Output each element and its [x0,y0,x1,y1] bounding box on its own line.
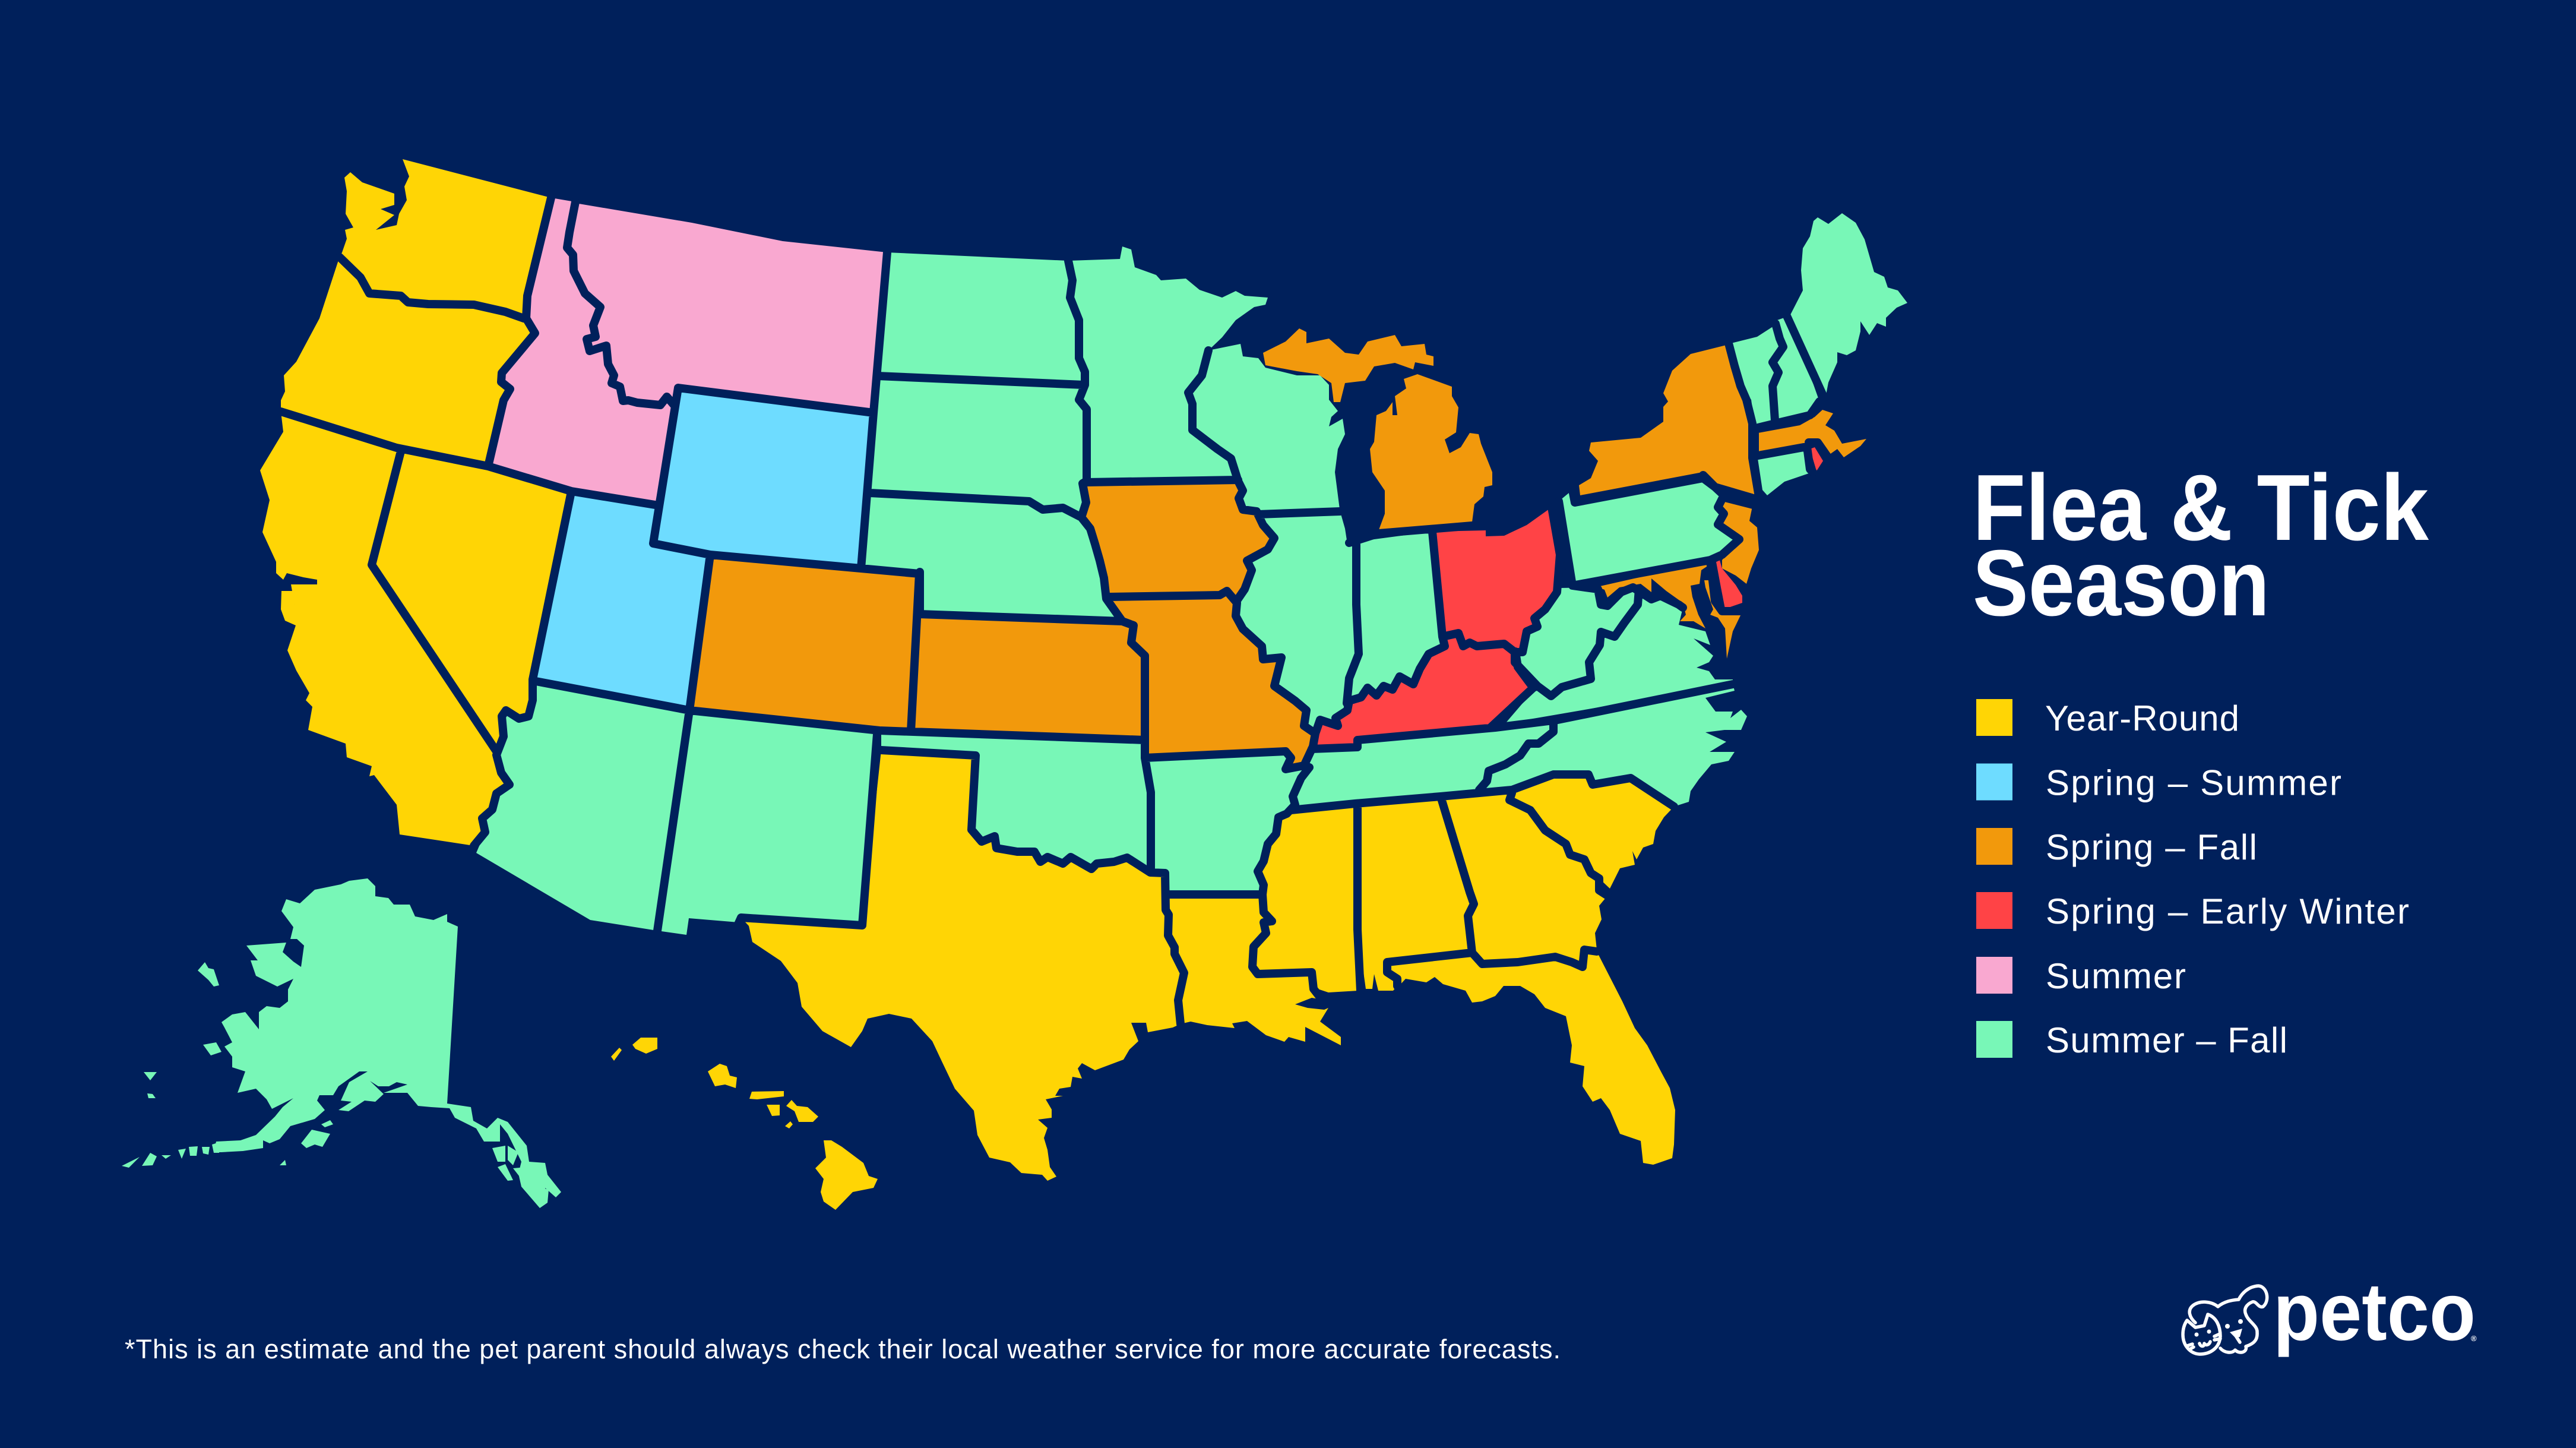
state: Ohio [1432,507,1560,652]
legend item: Summer: Summer [2046,956,2186,996]
state: Kansas [911,614,1145,740]
title [1973,456,2429,636]
state: Oklahoma [881,734,1151,872]
state: Arizona [476,681,689,931]
state: New Jersey [1718,495,1759,584]
state borders [281,198,1827,1024]
icon: dog and cat [2183,1286,2267,1354]
legend item: Summer – Fall: Summer – Fall [2046,1020,2287,1060]
registered mark: ® [2471,1334,2477,1343]
state: New York [1579,344,1759,500]
state: Colorado [689,555,919,731]
state: Maine [1790,213,1907,399]
state: Rhode Island [1810,447,1823,471]
legend item: Spring – Fall: Spring – Fall [2046,827,2257,867]
state: Montana [567,203,887,413]
state: Nebraska [861,493,1122,621]
state: South Carolina [1509,774,1674,889]
state: Indiana [1347,532,1445,703]
state: Arkansas [1145,751,1309,894]
title: Flea & Tick [1973,456,2429,560]
state: Connecticut [1758,450,1809,495]
state: Vermont [1731,325,1783,425]
legend item: Spring – Summer: Spring – Summer [2046,763,2341,803]
title: Season [1973,531,2270,636]
state: Louisiana [1166,894,1341,1045]
wordmark: petco [2273,1266,2476,1358]
state: Virginia [1505,589,1733,723]
state: Wisconsin [1188,344,1345,516]
state: Washington [340,159,551,318]
state: Alaska [122,878,561,1208]
state: Wyoming [653,388,874,568]
legend item: Year-Round: Year-Round [2045,698,2239,738]
state: Alabama [1355,796,1474,991]
state: Tennessee [1291,720,1558,810]
state: Massachusetts [1755,410,1866,457]
state: Maryland [1597,561,1742,659]
state: Texas [741,750,1184,1181]
state: Idaho [488,198,678,505]
state: West Virginia [1515,587,1639,696]
state: California [260,412,509,846]
state: Missouri [1109,591,1315,769]
state: North Carolina [1479,684,1747,807]
state: Iowa [1081,481,1274,600]
state: Hawaii [611,1038,878,1210]
state: Michigan upper peninsula [1263,328,1433,402]
footnote: *This is an estimate and the pet parent should always check their local weather service for more accurate forecasts. [125,1334,1561,1364]
legend [1976,698,2409,1060]
state: Delaware [1716,558,1742,609]
logo: petco [2183,1266,2477,1358]
state: Nevada [372,451,571,755]
state: Michigan lower peninsula [1370,374,1492,530]
state: Mississippi [1252,805,1358,992]
state: New Mexico [657,710,877,935]
state: Pennsylvania [1559,478,1739,586]
state: Florida [1387,950,1675,1165]
state: New Hampshire [1773,316,1819,421]
state: Georgia [1441,790,1607,967]
state: Utah [533,492,710,710]
state: Kentucky [1312,633,1533,749]
state: North Dakota [878,252,1085,385]
state: Oregon [281,257,535,466]
state: Illinois [1236,512,1359,734]
legend item: Summer [1976,956,2186,996]
legend item: Spring – Early Winter: Spring – Early Winter [2046,891,2409,931]
map: United States flea and tick seasons [122,159,1907,1210]
state: Minnesota [1068,246,1268,483]
state: South Dakota [870,376,1087,517]
